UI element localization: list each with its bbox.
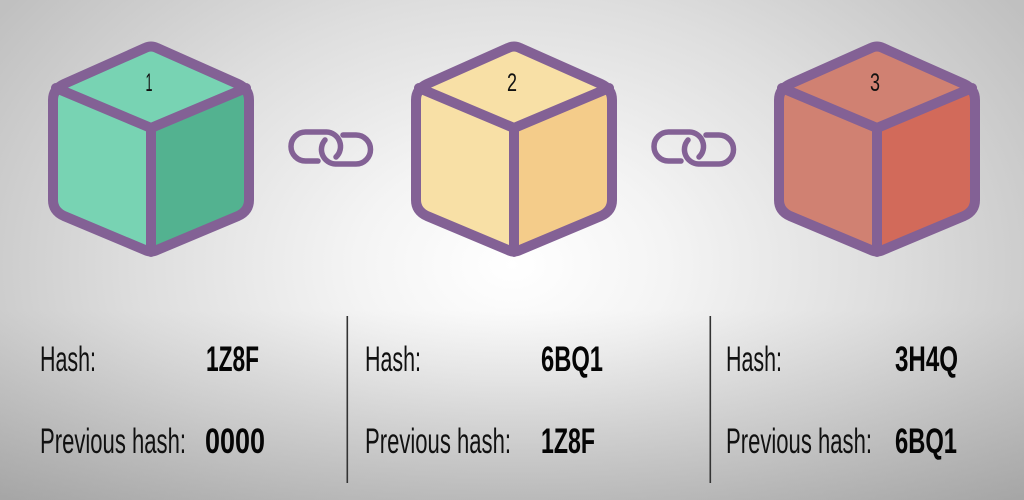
cube 3 (779, 46, 975, 252)
block 1 hash details: Previous hash: (40, 422, 186, 461)
block 2 hash details: Hash: (365, 340, 421, 379)
divider 1 (346, 316, 348, 483)
block 2 hash details: Previous hash: (365, 422, 511, 461)
block 2 hash details: 6BQ1 (541, 340, 603, 379)
block 2 hash details (365, 340, 603, 461)
block 1 hash details: 1Z8F (206, 340, 259, 379)
block 3 hash details: 6BQ1 (895, 422, 957, 461)
block number 1: 1 (146, 69, 152, 97)
block number 2: 2 (507, 69, 517, 97)
block 2 hash details: 1Z8F (541, 422, 595, 461)
block 1 hash details: 0000 (205, 422, 265, 461)
cube 2 (416, 46, 612, 252)
divider 2 (710, 316, 711, 483)
block 1 hash details (40, 340, 265, 461)
chain link 1 (291, 132, 370, 164)
block number 3: 3 (870, 69, 880, 97)
block 3 hash details: 3H4Q (895, 340, 958, 379)
block 3 hash details (726, 340, 958, 461)
block 3 hash details: Hash: (726, 340, 782, 379)
chain link 2 (654, 132, 734, 164)
cube 1 (53, 46, 249, 252)
block 1 hash details: Hash: (40, 340, 96, 379)
block 3 hash details: Previous hash: (726, 422, 872, 461)
